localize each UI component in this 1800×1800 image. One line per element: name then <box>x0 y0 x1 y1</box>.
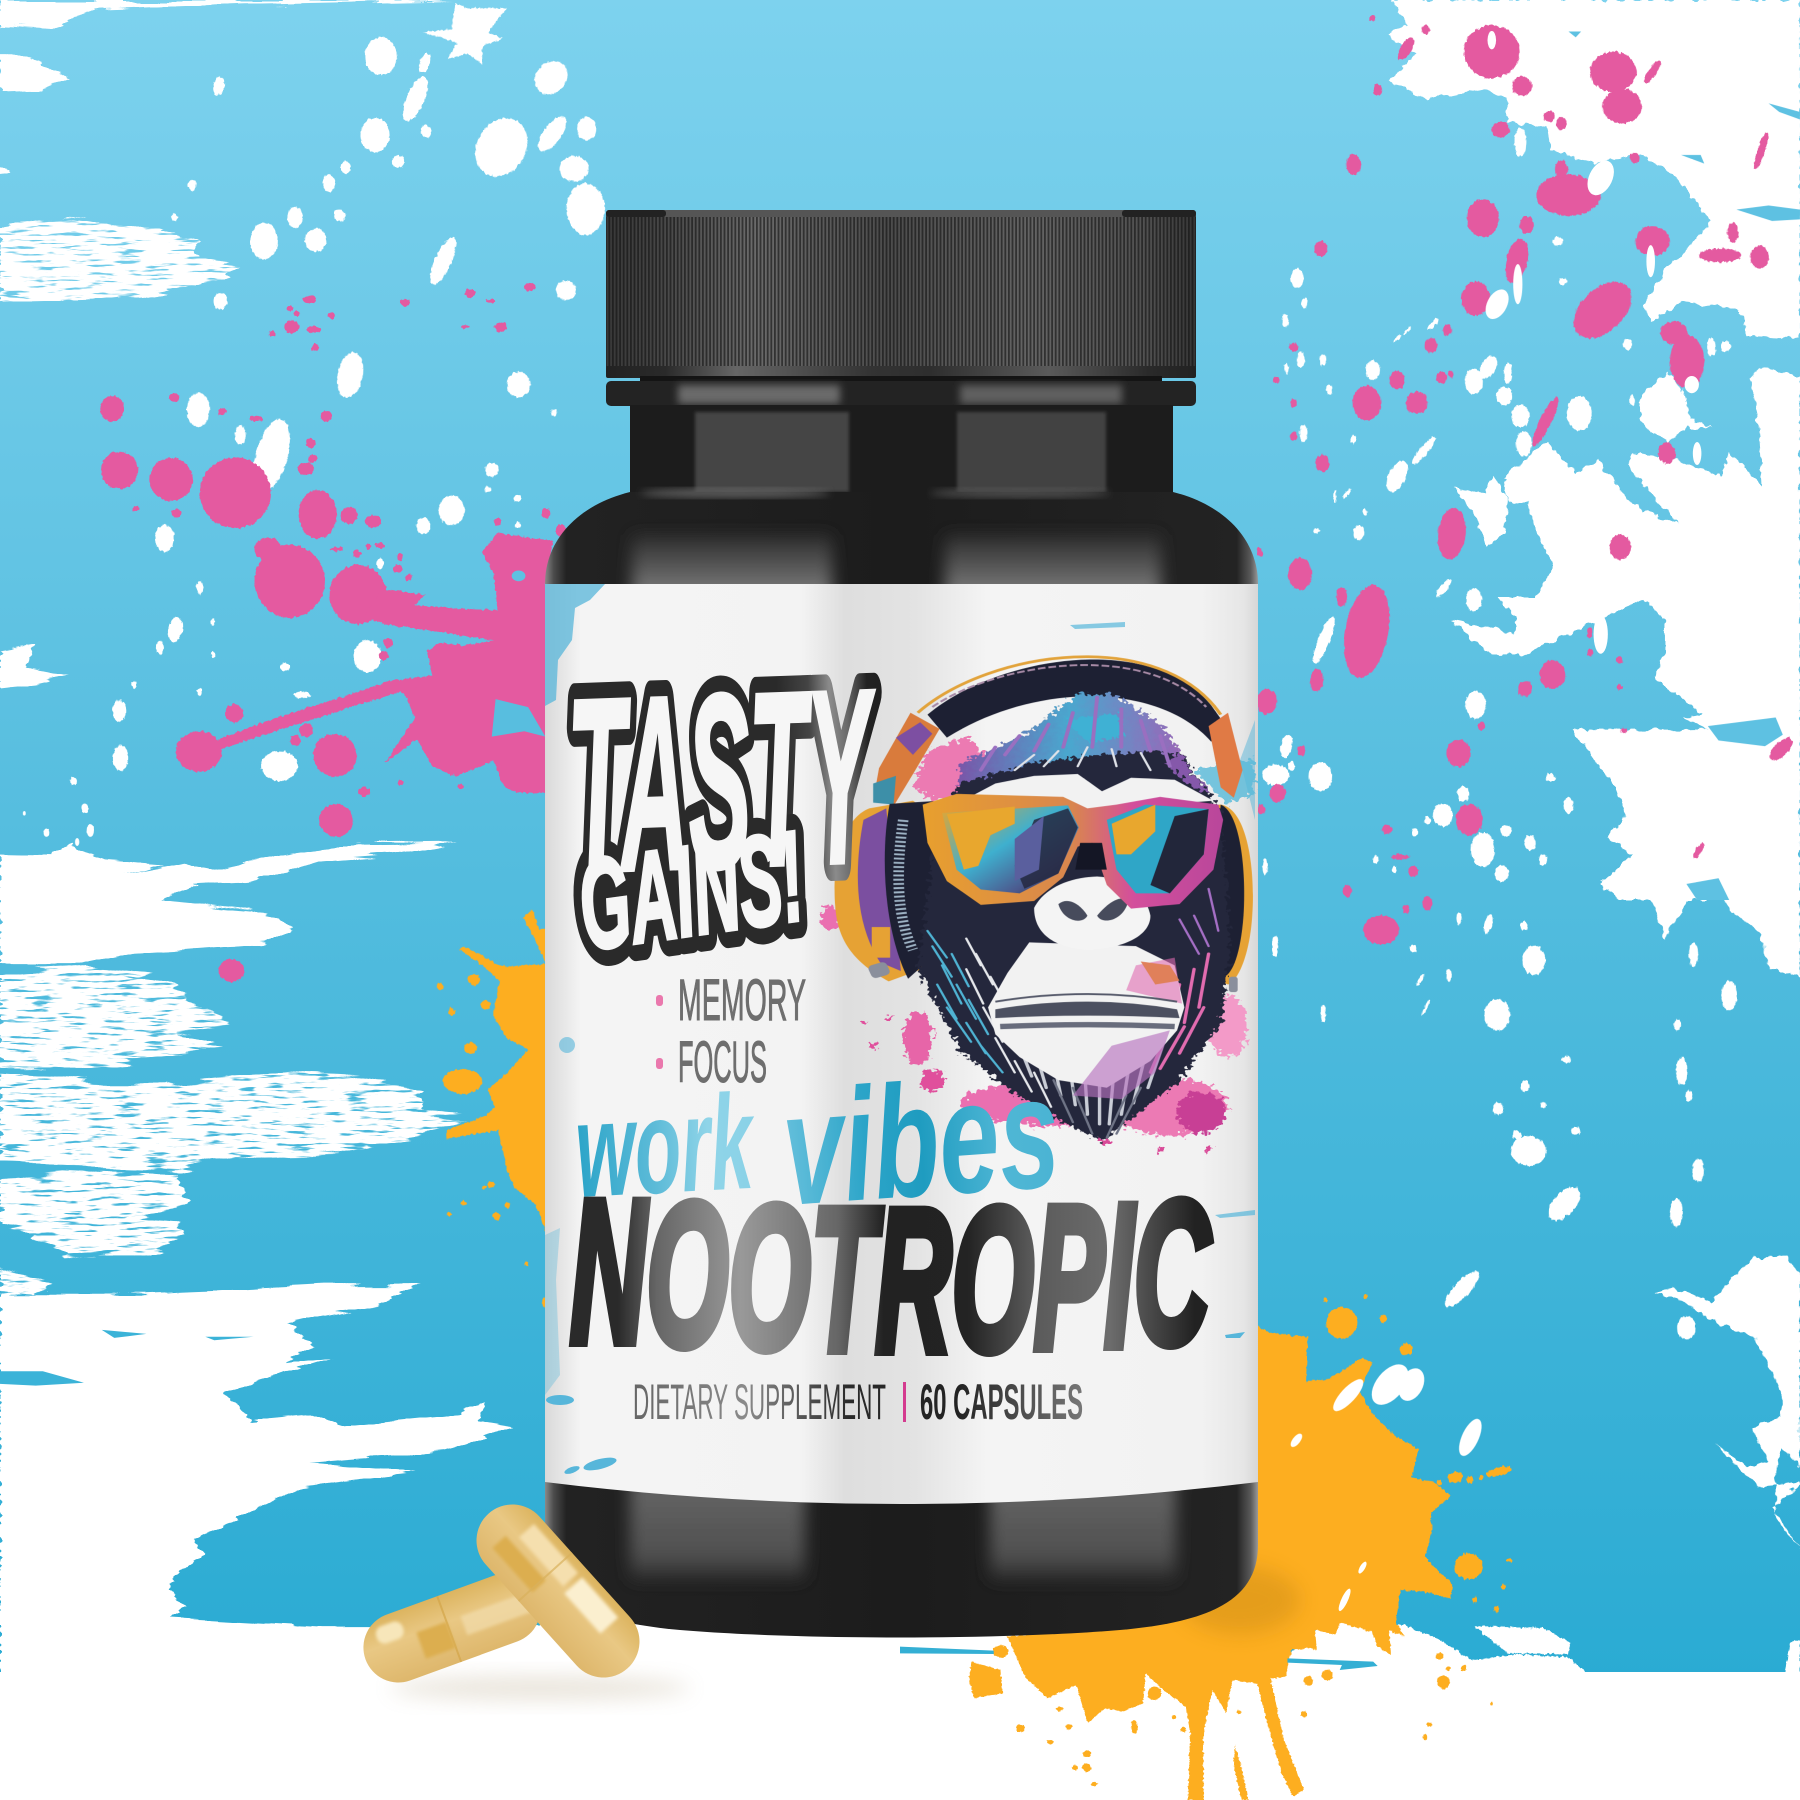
gorilla head fur <box>918 694 1230 1141</box>
illustration: gorilla with headphones and sunglasses <box>820 657 1255 1152</box>
panel: white brush mass lower left <box>0 843 560 1698</box>
capsule shadow <box>390 1676 690 1700</box>
headphone sliders <box>873 713 1243 805</box>
icon: capsule behind <box>354 1564 550 1692</box>
sunglasses <box>923 794 1223 909</box>
panel: pink dot lower left <box>219 767 544 982</box>
product label <box>545 584 1258 1504</box>
bottle <box>545 210 1258 1638</box>
logo outline: GAINS! <box>570 805 812 978</box>
supplement line: DIETARY SUPPLEMENT <box>633 1374 886 1430</box>
nose <box>1034 877 1150 950</box>
headphone band <box>918 657 1233 741</box>
logo letters: TASTY <box>564 637 883 925</box>
product label: MEMORY <box>678 968 806 1033</box>
white droplets on orange splat <box>1289 1356 1485 1614</box>
panel: white paint mass along the bottom right <box>1240 1622 1800 1800</box>
panel: textured white stroke upper left <box>0 217 464 1294</box>
panel: white splatter lower left specks <box>23 804 94 846</box>
bottle body <box>545 492 1258 1638</box>
paint splash behind gorilla <box>820 736 1255 1152</box>
muzzle and chin <box>988 942 1184 1099</box>
panel: orange paint splat bottom right, upper part <box>1240 1294 1512 1740</box>
bullet focus <box>656 1058 663 1069</box>
panel: white ground at the bottom <box>0 1620 1800 1800</box>
panel: pink splat holes and white droplets over pink <box>263 571 545 779</box>
panel: orange paint splat left of bottle <box>437 909 547 1307</box>
panel: white droplets on pink right <box>1482 31 1701 654</box>
bottle cap <box>606 210 1196 378</box>
panel: white dry-brush strokes top left <box>0 0 452 688</box>
label paint wash <box>545 584 1255 1476</box>
panel: blue brush wisps through bottom white <box>900 1647 1378 1670</box>
bullet memory <box>656 995 663 1006</box>
panel: white splatter right <box>1262 128 1731 882</box>
panel: white paint mass right upper <box>1386 0 1800 1549</box>
vibes: vibes <box>777 1041 1065 1239</box>
shoulder highlights <box>632 489 1161 605</box>
panel: orange paint drips beneath the bottle <box>969 1480 1466 1800</box>
logo outline: TASTY <box>564 637 883 925</box>
fur strokes <box>927 697 1218 1138</box>
benefit list: FOCUS <box>678 1030 767 1095</box>
work: work <box>572 1066 760 1226</box>
divider bar <box>903 1382 906 1422</box>
panel: white splatter lower right <box>1272 912 1737 1339</box>
panel: white splatter left and top <box>44 3 605 836</box>
bottle collar and neck <box>606 376 1196 500</box>
panel: pink paint splat right <box>1256 15 1794 897</box>
logo letters: GAINS! <box>570 805 812 978</box>
right ear cup <box>1206 805 1253 992</box>
icon: capsule in front <box>462 1490 654 1692</box>
panel: pink paint splat left <box>100 283 566 837</box>
brow <box>966 774 1213 810</box>
shadow under bottle on orange <box>1180 1566 1300 1634</box>
flavour script: work vibes <box>572 1041 1065 1239</box>
panel: blue inlets in lower-left white mass <box>0 1330 254 1386</box>
brand logo: Tasty Gains! <box>564 637 883 978</box>
panel: pink splat mid-right lower <box>1344 886 1432 945</box>
left ear cup <box>834 801 944 981</box>
mouth <box>995 994 1179 1027</box>
base highlights <box>630 1480 1176 1580</box>
panel: blue wisps over right white mass <box>1569 32 1800 900</box>
hair colour <box>957 694 1209 793</box>
product label: 60 CAPSULES <box>920 1374 1083 1430</box>
benefit list <box>656 968 806 1095</box>
product name: Nootropic: NOOTROPIC <box>570 1158 1211 1395</box>
